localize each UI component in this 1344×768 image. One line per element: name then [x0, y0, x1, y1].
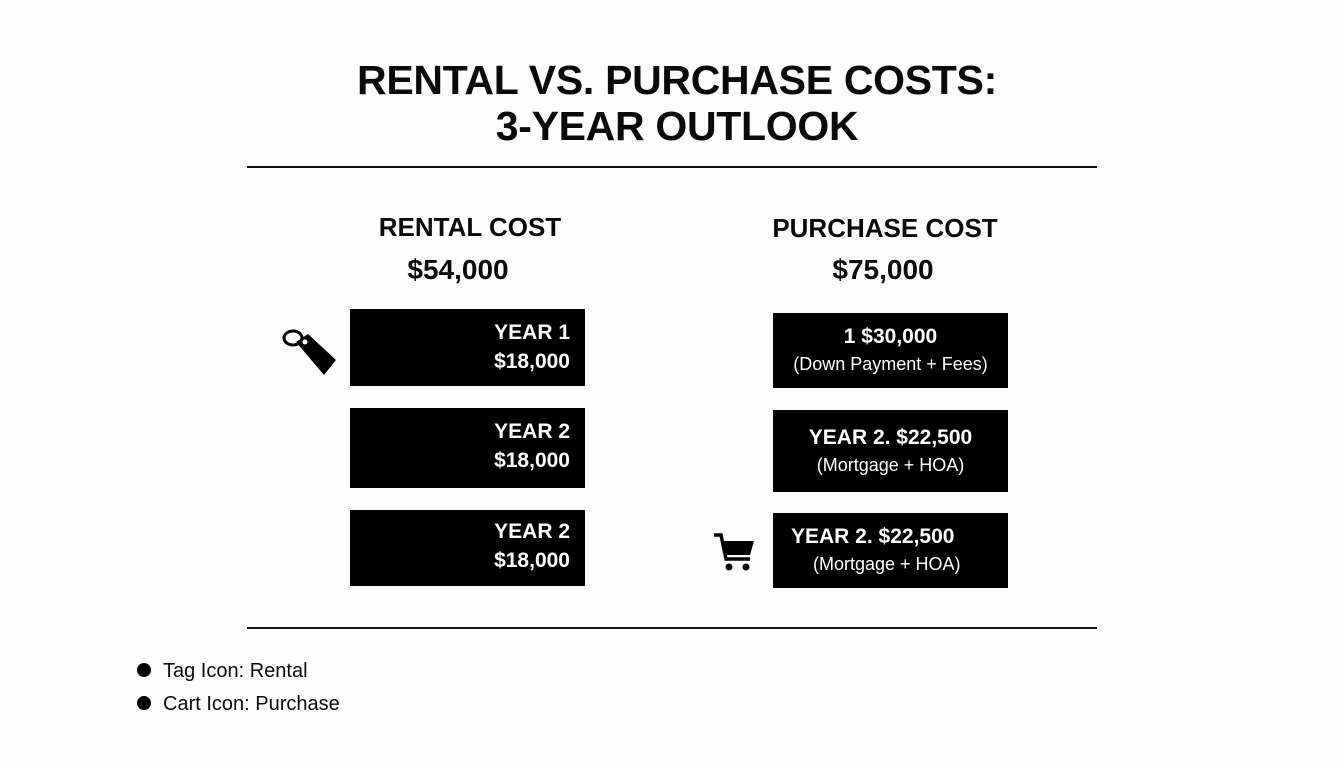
purchase year 2: (Mortgage + HOA) — [817, 455, 964, 475]
icon: cart — [714, 533, 754, 570]
heading: rental cost: RENTAL COST — [379, 212, 561, 242]
rental year 1: YEAR 1 — [494, 321, 570, 344]
rental year 3: $18,000 — [494, 549, 570, 572]
rental year 3: YEAR 2 — [494, 520, 570, 543]
purchase year 3: YEAR 2. $22,500 — [791, 525, 954, 548]
heading: purchase cost: PURCHASE COST — [772, 213, 998, 243]
title: RENTAL VS. PURCHASE COSTS: — [357, 57, 997, 103]
purchase year 1: (Down Payment + Fees) — [793, 354, 988, 374]
title — [357, 57, 997, 149]
legend item: tag: Tag Icon: Rental — [163, 660, 308, 682]
purchase year 3 — [773, 513, 1008, 588]
purchase total: $75,000 — [832, 254, 934, 285]
rental year 3 — [350, 510, 585, 586]
purchase year 2: YEAR 2. $22,500 — [809, 426, 972, 449]
purchase year 1: 1 $30,000 — [844, 325, 937, 348]
title: 3-YEAR OUTLOOK — [496, 103, 858, 149]
rental year 1 — [350, 309, 585, 386]
rental year 2: YEAR 2 — [494, 420, 570, 443]
purchase year 2 — [773, 410, 1008, 492]
rental year 2 — [350, 408, 585, 488]
rental year 1: $18,000 — [494, 350, 570, 373]
rental total: $54,000 — [407, 254, 509, 285]
rental year 2: $18,000 — [494, 449, 570, 472]
legend — [137, 660, 340, 715]
icon: tag — [282, 330, 336, 375]
purchase year 3: (Mortgage + HOA) — [813, 554, 961, 574]
purchase year 1 — [773, 313, 1008, 388]
legend item: cart: Cart Icon: Purchase — [163, 693, 340, 715]
